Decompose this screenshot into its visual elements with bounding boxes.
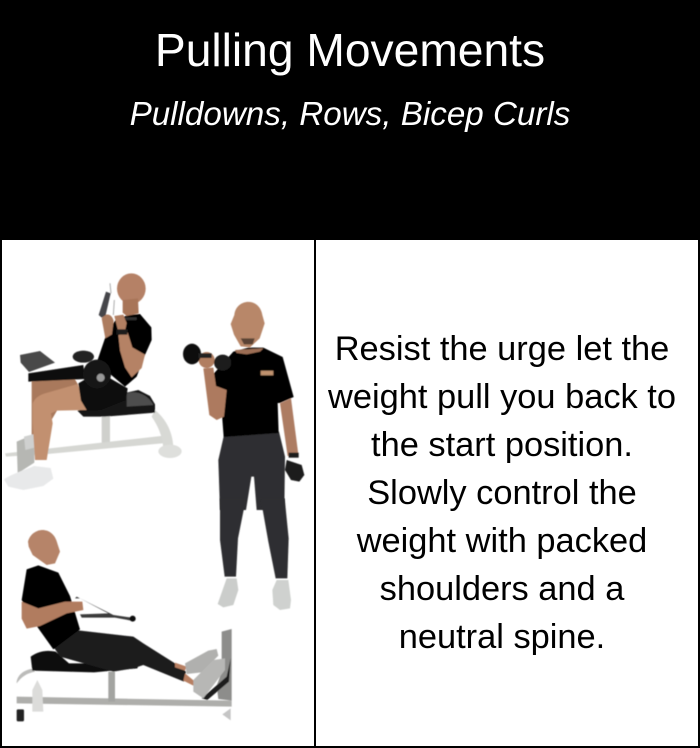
title: Pulling Movements: [155, 24, 545, 76]
header band: [0, 0, 700, 240]
coaching cue text: [328, 330, 676, 656]
panel: exercise photos: [0, 240, 314, 748]
coaching cue text: Resist the urge let the: [335, 330, 669, 368]
figure: seated row: [17, 530, 232, 721]
coaching cue text: weight pull you back to: [328, 378, 676, 416]
coaching cue text: the start position.: [371, 426, 633, 464]
figure: seated pulldown: [4, 273, 182, 490]
subtitle: Pulldowns, Rows, Bicep Curls: [130, 96, 570, 133]
coaching cue text: shoulders and a: [380, 570, 624, 608]
panel: coaching cue: [314, 240, 700, 748]
coaching cue text: weight with packed: [357, 522, 647, 560]
coaching cue text: neutral spine.: [399, 618, 605, 656]
coaching cue text: Slowly control the: [367, 474, 637, 512]
figure: bicep curl: [183, 302, 304, 510]
figure: legs of curl: [218, 498, 291, 610]
